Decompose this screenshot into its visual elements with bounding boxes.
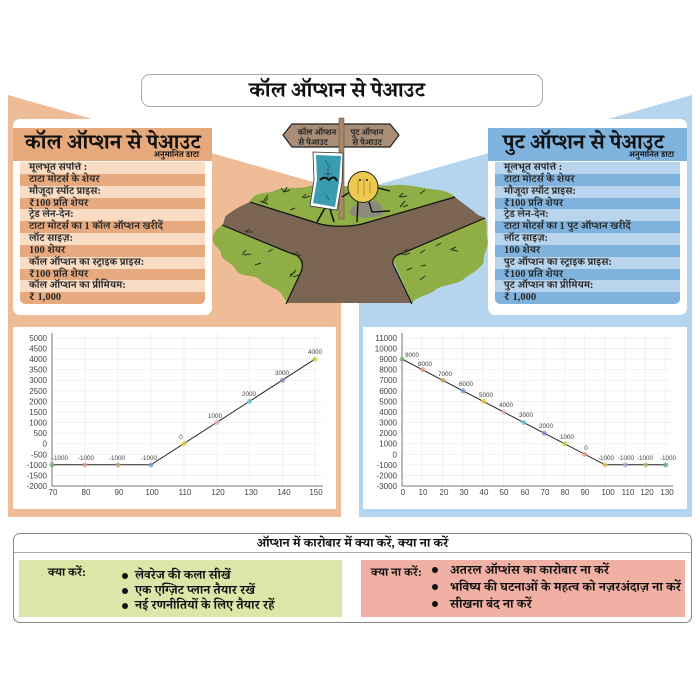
line chart: put option payoff: 50	[500, 488, 509, 497]
line chart: put option payoff: 5000	[479, 392, 493, 399]
do item 1: लेवरेज की कला सीखें	[135, 568, 231, 582]
panel: call option	[13, 119, 212, 315]
grass: back	[250, 185, 455, 226]
table: put option data: मूलभूत संपत्ति :	[504, 162, 562, 173]
line chart: call option payoff: 3000	[29, 376, 48, 385]
line chart: put option payoff: 30	[460, 488, 469, 497]
line chart: call option payoff: 1000	[208, 413, 222, 420]
title	[141, 74, 543, 107]
line chart: put option payoff: 2000	[539, 423, 553, 430]
heading: do's and don'ts: ऑप्शन में कारोबार में क्या करें, क्या ना करें	[257, 536, 448, 550]
table: call option data: 100 शेयर	[29, 245, 65, 256]
line chart: call option payoff: 1500	[29, 408, 48, 417]
line chart: call option payoff: 500	[34, 429, 48, 438]
line chart: put option payoff: 70	[541, 488, 550, 497]
line chart: put option payoff: -1000	[637, 455, 654, 462]
table: call option data: कॉल ऑप्शन का प्रीमियम:	[29, 280, 126, 291]
line chart: call option payoff: 1000	[29, 418, 48, 428]
table: put option data: पुट ऑप्शन का प्रीमियम:	[504, 280, 593, 291]
character: banknote	[310, 152, 343, 222]
don't item 1: अतरल ऑप्शंस का कारोबार ना करें	[450, 562, 609, 577]
signpost	[283, 118, 399, 219]
line chart: call option payoff: 3000	[275, 370, 289, 377]
line chart: put option payoff: 2000	[379, 429, 398, 438]
line chart: call option payoff: 90	[115, 488, 124, 497]
line chart: put option payoff: 8000	[418, 361, 432, 368]
line chart: put option payoff: -1000	[618, 455, 635, 462]
line chart: put option payoff: 5000	[379, 397, 398, 406]
line chart: put option payoff: 8000	[379, 366, 398, 375]
sign text: put: पुट ऑप्शन	[350, 127, 385, 138]
line chart: call option payoff: -1000	[109, 455, 126, 462]
line chart: call option payoff: 2000	[29, 397, 48, 406]
line chart: put option payoff: 1000	[560, 434, 574, 441]
table: put option data: ₹ 1,000	[504, 292, 536, 303]
road	[223, 197, 485, 303]
table: put option data: टाटा मोटर्स का 1 पुट ऑप्शन खरीदें	[504, 221, 631, 232]
line chart: call option payoff: 110	[179, 488, 192, 497]
heading: call option: अनुमानित डाटा	[154, 149, 199, 159]
table: call option data: ट्रेड लेन-देन:	[29, 209, 74, 220]
table: put option data: ₹100 प्रति शेयर	[504, 198, 563, 209]
line chart: call option payoff: 0	[43, 440, 48, 449]
heading: put option: अनुमानित डाटा	[629, 149, 674, 159]
table: call option data: टाटा मोटर्स के शेयर	[29, 174, 100, 185]
line chart: call option payoff: -2000	[27, 482, 48, 491]
line chart: call option payoff: 4000	[29, 355, 48, 364]
line chart: put option payoff: 4000	[499, 402, 513, 409]
line chart: put option payoff: 6000	[459, 381, 473, 388]
line chart: put option payoff: 20	[440, 488, 449, 497]
table: put option data: टाटा मोटर्स के शेयर	[504, 174, 575, 185]
line chart: put option payoff: 120	[640, 488, 654, 497]
line chart: call option payoff: -1000	[78, 455, 95, 462]
line chart: put option payoff: 130	[660, 488, 674, 497]
table: call option data: मूलभूत संपत्ति :	[29, 162, 87, 173]
line chart: call option payoff: -1500	[27, 471, 48, 480]
line chart: put option payoff: 11000	[375, 334, 398, 343]
table: call option data: टाटा मोटर्स का 1 कॉल ऑप्शन खरीदें	[29, 221, 163, 232]
table: put option data: ₹100 प्रति शेयर	[504, 269, 563, 280]
character: coin	[342, 172, 390, 222]
don't item 2: भविष्य की घटनाओं के महत्व को नज़रअंदाज़ ना करें	[450, 579, 681, 594]
heading: put option: पुट ऑप्शन से पेआउट	[503, 130, 664, 154]
line chart: call option payoff: 3500	[29, 366, 48, 375]
line chart: put option payoff: 6000	[379, 387, 398, 396]
line chart: put option payoff: 10000	[375, 344, 398, 354]
line chart: put option payoff: 10	[419, 488, 428, 497]
heading: do's and don'ts	[14, 534, 691, 553]
table: put option data	[495, 162, 680, 304]
title: कॉल ऑप्शन से पेआउट	[249, 78, 425, 102]
table: call option data: ₹ 1,000	[29, 292, 61, 303]
grass: left	[213, 225, 303, 303]
line chart: call option payoff: 4000	[308, 349, 322, 356]
panel: don'ts	[361, 560, 685, 617]
chart card: call payoff	[13, 327, 336, 509]
sign text: put second line: से पेआउट	[351, 137, 383, 147]
don't item 3: सीखना बंद ना करें	[450, 596, 532, 611]
line chart: call option payoff: 120	[211, 488, 225, 497]
table: call option data: ₹100 प्रति शेयर	[29, 269, 88, 280]
line chart: call option payoff: -1000	[52, 455, 69, 462]
line chart: put option payoff: 0	[401, 488, 406, 497]
grass tufts	[242, 187, 458, 280]
table: put option data: ट्रेड लेन-देन:	[504, 209, 549, 220]
table: put option data: 100 शेयर	[504, 245, 540, 256]
line chart: put option payoff: 3000	[379, 418, 398, 428]
line chart: put option payoff: 0	[393, 450, 398, 459]
line chart: put option payoff: 0	[584, 445, 588, 452]
sign text: call: कॉल ऑप्शन	[297, 127, 338, 137]
table: call option data: ₹100 प्रति शेयर	[29, 198, 88, 209]
table: call option data: लॉट साइज़:	[29, 233, 73, 244]
line chart: call option payoff: 2000	[242, 391, 256, 398]
table: put option data: लॉट साइज़:	[504, 233, 548, 244]
line chart: put option payoff: 1000	[379, 440, 398, 449]
panel: do's and don'ts	[13, 533, 692, 623]
line chart: put option payoff: 4000	[379, 408, 398, 417]
chart card: put payoff	[363, 327, 687, 509]
table: call option data	[20, 162, 205, 304]
rock	[349, 201, 383, 218]
do item 2: एक एग्ज़िट प्लान तैयार रखें	[135, 583, 255, 597]
panel: do's	[19, 560, 342, 617]
line chart: put option payoff: -1000	[377, 461, 398, 470]
line chart: call option payoff: -500	[31, 450, 48, 459]
line chart: put option payoff: -2000	[377, 471, 398, 480]
line chart: put option payoff: 90	[581, 488, 590, 497]
line chart: call option payoff: 5000	[29, 334, 48, 343]
line chart: call option payoff: 0	[179, 434, 183, 441]
line chart: call option payoff: 150	[309, 488, 323, 497]
line chart: put option payoff: 7000	[379, 376, 398, 385]
line chart: put option payoff: -1000	[660, 455, 677, 462]
table: call option data: कॉल ऑप्शन का स्ट्राइक प्राइस:	[29, 257, 144, 268]
sign text: call second line: से पेआउट	[297, 137, 329, 147]
line chart: put option payoff: 100	[601, 488, 615, 497]
label: don'ts: क्या ना करें:	[371, 565, 422, 579]
line chart: put option payoff: 80	[561, 488, 570, 497]
grass: right	[393, 218, 488, 303]
line chart: call option payoff: -1000	[141, 455, 158, 462]
heading: call option	[13, 128, 212, 161]
do item 3: नई रणनीतियों के लिए तैयार रहें	[135, 598, 274, 612]
line chart: put option payoff: 9000	[405, 352, 419, 359]
line chart: call option payoff: 80	[82, 488, 91, 497]
line chart: call option payoff: 70	[49, 488, 58, 497]
line chart: call option payoff: 100	[145, 488, 159, 497]
table: put option data: मौजूदा स्पॉट प्राइस:	[504, 186, 576, 197]
table: put option data: पुट ऑप्शन का स्ट्राइक प्राइस:	[504, 257, 612, 268]
line chart: put option payoff: 9000	[379, 355, 398, 364]
label: do's: क्या करें:	[48, 565, 86, 579]
heading: put option	[488, 128, 687, 161]
line chart: put option payoff: 7000	[438, 371, 452, 378]
line chart: put option payoff: -3000	[377, 482, 398, 491]
line chart: call option payoff: -1000	[27, 461, 48, 470]
road edges	[222, 197, 485, 304]
line chart: put option payoff: 40	[480, 488, 489, 497]
line chart: put option payoff: 110	[622, 488, 635, 497]
line chart: call option payoff: 130	[244, 488, 258, 497]
table: call option data: मौजूदा स्पॉट प्राइस:	[29, 186, 101, 197]
heading: call option: कॉल ऑप्शन से पेआउट	[25, 130, 201, 154]
panel: put option	[488, 119, 687, 315]
line chart: call option payoff: 2500	[29, 387, 48, 396]
line chart: put option payoff: 3000	[519, 412, 533, 419]
line chart: call option payoff: 140	[277, 488, 291, 497]
line chart: call option payoff: 4500	[29, 344, 48, 354]
line chart: put option payoff: -1000	[598, 455, 615, 462]
line chart: put option payoff: 60	[521, 488, 530, 497]
